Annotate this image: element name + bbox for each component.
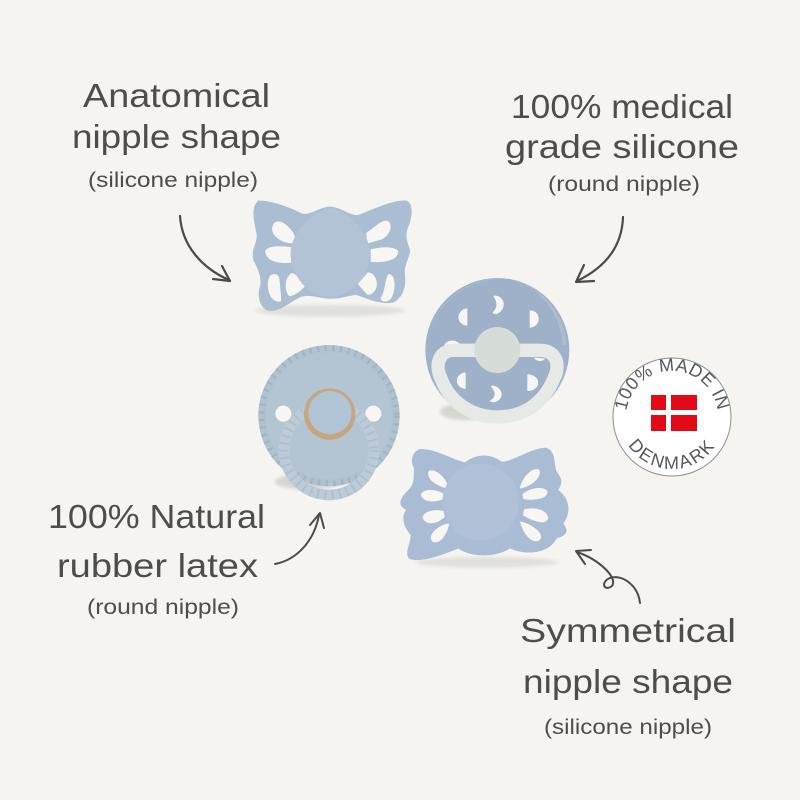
nipple shield centre — [442, 464, 519, 541]
heading: anatomical nipple shape: nipple shape — [72, 118, 281, 155]
heading: natural rubber latex: rubber latex — [57, 547, 259, 584]
rope ring handle — [284, 405, 374, 495]
arrow: to moon pacifier — [576, 217, 623, 282]
glow button — [474, 327, 520, 373]
pacifier: rope — [258, 345, 400, 495]
arrow: to candy pacifier — [576, 550, 640, 603]
heading: anatomical nipple shape: (silicone nipple) — [88, 169, 258, 192]
button with latex rim — [304, 388, 355, 440]
badge: made in Denmark — [612, 358, 732, 476]
holes: butterfly cut-outs — [266, 222, 397, 301]
heading: symmetrical nipple shape: Symmetrical — [520, 612, 736, 649]
heading: medical grade silicone: grade silicone — [505, 128, 739, 165]
holes — [275, 406, 291, 422]
pacifier: butterfly — [253, 201, 412, 317]
heading: natural rubber latex — [48, 498, 265, 619]
heading: medical grade silicone — [505, 88, 739, 196]
heading: natural rubber latex: 100% Natural — [48, 498, 265, 535]
flag of Denmark — [651, 395, 697, 431]
pacifier: moon — [425, 278, 569, 422]
heading: symmetrical nipple shape — [520, 612, 736, 739]
moon-shaped holes — [445, 296, 544, 402]
heading: symmetrical nipple shape: nipple shape — [523, 663, 733, 700]
heading: anatomical nipple shape: Anatomical — [83, 77, 270, 114]
nipple shield centre — [291, 208, 370, 297]
wing cut-outs — [422, 470, 547, 542]
pacifier: candy — [400, 448, 568, 568]
glow ring handle — [438, 350, 557, 417]
badge upper text: 100% MADE IN — [615, 358, 730, 410]
arrow: to butterfly pacifier — [180, 216, 230, 281]
heading: symmetrical nipple shape: (silicone nipple) — [544, 716, 712, 739]
heading: medical grade silicone: (round nipple) — [548, 173, 700, 196]
arrow: to rope pacifier — [275, 513, 324, 564]
badge lower text: DENMARK — [628, 438, 715, 469]
heading: anatomical nipple shape — [72, 77, 281, 192]
heading: medical grade silicone: 100% medical — [511, 88, 733, 125]
heading: natural rubber latex: (round nipple) — [87, 596, 239, 619]
